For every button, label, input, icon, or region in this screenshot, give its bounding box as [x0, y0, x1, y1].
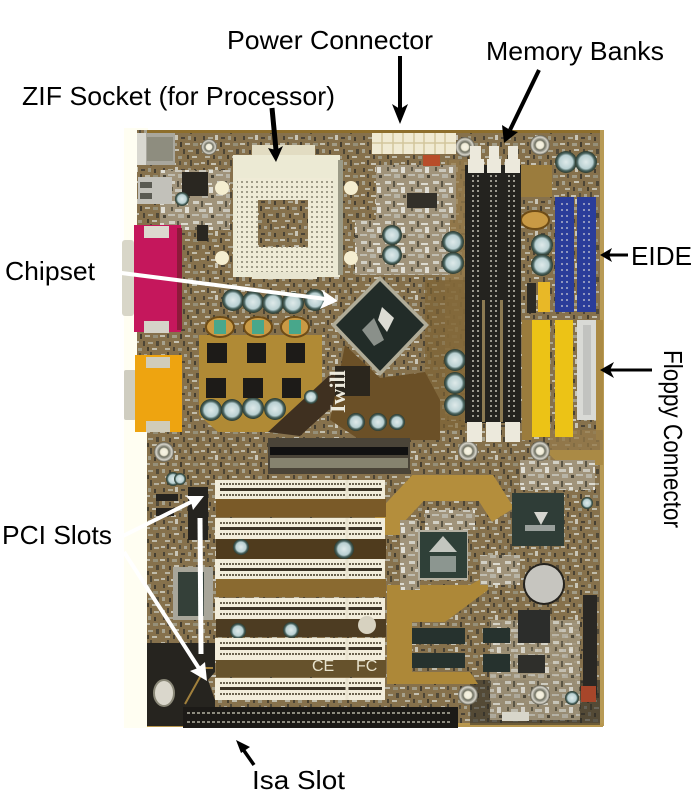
memory banks [465, 146, 521, 442]
grey component clusters [160, 165, 595, 720]
black jumper block [527, 283, 536, 313]
memory clips [467, 146, 520, 442]
board background [124, 128, 604, 728]
AGP slot [268, 438, 410, 474]
ZIF socket [233, 145, 343, 279]
CE FC marks [312, 658, 377, 675]
small chip left [173, 567, 213, 620]
capacitors between PCI slots [230, 539, 354, 639]
CE FC marks: CE [312, 658, 334, 675]
arrow: PCI slot bottom [124, 552, 207, 681]
slot 1 [215, 480, 385, 499]
floppy connectors yellow and white [532, 320, 596, 437]
mounting hole lower left [154, 680, 174, 706]
mounting holes [154, 135, 550, 705]
serial port orange [124, 355, 182, 432]
label: PCI Slots: PCI Slots [2, 520, 112, 550]
label: Isa Slot: Isa Slot [252, 765, 346, 795]
arrow: memory banks [502, 70, 539, 143]
arrow: EIDE [600, 248, 628, 262]
slot break lines [346, 480, 348, 700]
motherboard photo [122, 128, 604, 728]
slot 3 [215, 559, 385, 579]
Iwill logo: Iwill [325, 370, 350, 413]
brown bands between PCI slots [216, 499, 386, 677]
gold trace around chip [388, 488, 503, 535]
arrow: ZIF socket [268, 108, 283, 162]
slot 2 [215, 518, 385, 539]
memory chips and ICs [412, 610, 550, 673]
label: Power Connector: Power Connector [227, 25, 433, 55]
parallel port pink [122, 225, 182, 333]
USB port [137, 133, 175, 165]
label: Chipset: Chipset [5, 256, 96, 286]
dark chip and headers left column [156, 487, 208, 540]
arrow: PCI slot top [123, 496, 204, 536]
dark header blocks upper left [182, 172, 208, 241]
slot 4 [215, 598, 385, 619]
pin headers right [583, 595, 597, 695]
arrow: floppy connector [600, 362, 652, 378]
arrow: chipset [98, 270, 338, 309]
label: EIDE: EIDE [631, 241, 692, 271]
slot 6 [215, 678, 385, 700]
dark green area lower left [147, 643, 215, 726]
capacitors [166, 151, 597, 705]
small red header [423, 155, 440, 166]
power transistors [206, 343, 305, 398]
CE FC marks: FC [356, 658, 377, 675]
label: Floppy Connector: Floppy Connector [658, 350, 688, 528]
dark trace region near chipset [268, 372, 345, 436]
label: ZIF Socket: ZIF Socket (for Processor) [22, 81, 335, 111]
gold region lower centre [387, 575, 488, 684]
white connector bottom [502, 712, 529, 721]
dark block below chipset [335, 366, 370, 396]
checkmark badge [358, 616, 376, 634]
EIDE connectors blue [555, 197, 596, 312]
yellow header [538, 282, 550, 312]
label: Memory Banks: Memory Banks [486, 36, 664, 66]
power connector [372, 133, 456, 154]
socket mounting holes [215, 181, 358, 265]
PCI slots [215, 480, 385, 700]
ISA slot [183, 707, 458, 728]
red header bottom right [581, 686, 596, 702]
CMOS battery [523, 563, 565, 605]
small chip near top [407, 193, 437, 208]
arrow: power connector [392, 56, 408, 124]
gold power area [199, 335, 322, 432]
slot 5 [215, 638, 385, 660]
arrow: Isa slot [236, 740, 254, 765]
arrow: PCI slot middle [200, 518, 201, 654]
VIA south chip [512, 493, 564, 546]
network port [138, 177, 172, 204]
inductor cores [214, 320, 301, 334]
gold band right side [545, 450, 603, 465]
American Megatrends chip [418, 530, 468, 580]
rear I/O ports [137, 133, 175, 204]
inductor coils [206, 211, 549, 337]
chipset [331, 276, 429, 376]
